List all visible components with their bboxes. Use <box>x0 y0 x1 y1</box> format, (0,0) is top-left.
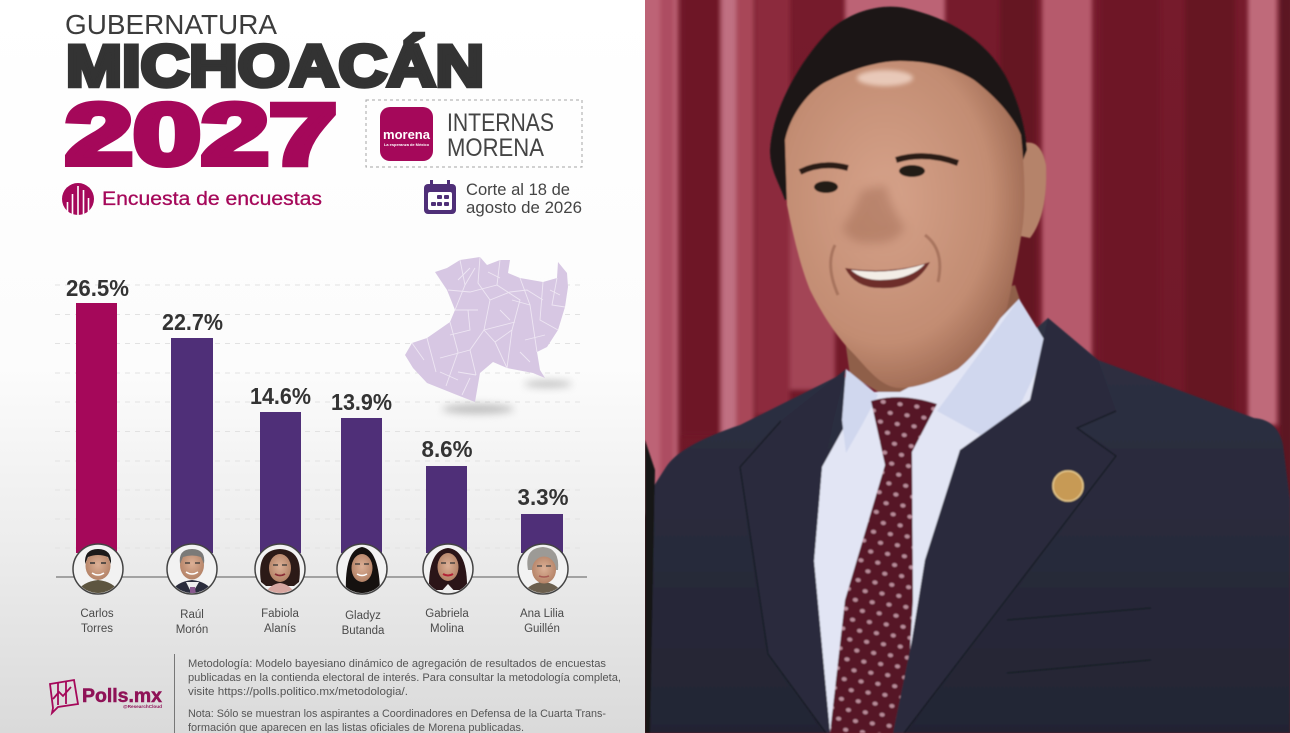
icon: morena logo: La esperanza de México <box>384 142 430 147</box>
bar: Ana Lilia Guillén 3.3% <box>518 484 568 553</box>
bar chart <box>66 275 568 553</box>
candidate names <box>80 608 565 637</box>
heading: 2027: 2027 <box>65 87 337 183</box>
icon: morena logo: morena <box>383 127 431 142</box>
bar: Gladyz Butanda 13.9%: 13.9% <box>331 389 392 415</box>
badge: Internas Morena <box>366 100 582 167</box>
map: Michoacán <box>405 257 572 414</box>
candidate names: Fabiola <box>261 608 299 620</box>
icon: chart bubble <box>50 680 78 713</box>
curtain background <box>640 0 1290 733</box>
candidate names: Gabriela <box>425 608 469 620</box>
candidate names: Molina <box>430 623 465 635</box>
methodology note: Nota: Sólo se muestran los aspirantes a Coordinadores en Defensa de la Cuarta Trans- <box>188 708 606 720</box>
logo: Polls.mx <box>50 680 162 713</box>
candidate names: Morón <box>176 624 208 636</box>
ear <box>1015 142 1046 238</box>
candidate names: Gladyz <box>345 610 381 622</box>
icon: calendar <box>424 180 456 214</box>
candidate names: Alanís <box>264 623 296 635</box>
portrait: Ana Lilia Guillén <box>518 544 568 595</box>
methodology note: visite https://polls.politico.mx/metodologia/. <box>188 686 408 698</box>
bar: Fabiola Alanís 14.6%: 14.6% <box>250 383 311 409</box>
subtitle: Encuesta de encuestas: Encuesta de encuestas <box>102 188 322 210</box>
logo: Polls.mx: @ResearchCloud <box>123 704 162 709</box>
lapel pin <box>1053 471 1083 501</box>
bar: Raúl Morón 22.7% <box>162 309 223 553</box>
subtitle: Encuesta de encuestas <box>62 183 322 215</box>
candidate names: Torres <box>81 623 113 635</box>
bar: Carlos Torres 26.5% <box>66 275 129 553</box>
candidate names: Ana Lilia <box>520 608 565 620</box>
mouth <box>845 262 930 288</box>
photo: smiling man in dark suit before a red curtain <box>640 0 1290 733</box>
suit jacket <box>645 318 1290 733</box>
head <box>770 7 1027 388</box>
bar: Ana Lilia Guillén 3.3%: 3.3% <box>518 484 568 510</box>
badge label <box>447 109 554 162</box>
bar: Raúl Morón 22.7%: 22.7% <box>162 309 223 335</box>
heading: Michoacán: MICHOACÁN <box>66 34 484 99</box>
panel: infographic background <box>0 0 645 733</box>
bar: Gladyz Butanda 13.9% <box>331 389 392 553</box>
bar: Carlos Torres 26.5%: 26.5% <box>66 275 129 301</box>
icon: morena logo <box>380 107 433 161</box>
badge label: MORENA <box>447 134 544 162</box>
candidate names: Raúl <box>180 609 204 621</box>
candidate names: Guillén <box>524 623 560 635</box>
necktie <box>830 397 937 733</box>
methodology note: publicadas en la contienda electoral de interés. Para consultar la metodología completa, <box>188 672 621 684</box>
nose <box>842 185 905 243</box>
heading: Gubernatura: GUBERNATURA <box>65 9 277 40</box>
eyebrows <box>800 156 958 172</box>
hair <box>770 7 1027 200</box>
neck <box>845 284 1020 393</box>
jacket lapels <box>768 318 1093 733</box>
portrait: Raúl Morón <box>167 544 217 595</box>
portrait: Carlos Torres <box>73 544 123 595</box>
date cut-off: Corte al 18 de <box>466 181 570 199</box>
bar: Fabiola Alanís 14.6% <box>250 383 311 553</box>
methodology note <box>188 658 621 733</box>
date cut-off: agosto de 2026 <box>466 199 582 217</box>
portrait: Gabriela Molina <box>423 544 473 595</box>
candidate names: Butanda <box>342 625 385 637</box>
portrait: Gladyz Butanda <box>337 544 387 595</box>
eyes <box>814 165 925 193</box>
bar: Gabriela Molina 8.6%: 8.6% <box>422 436 472 462</box>
icon: poll bars in circle <box>62 183 94 215</box>
candidate names: Carlos <box>80 608 114 620</box>
bar: Gabriela Molina 8.6% <box>422 436 472 553</box>
badge label: INTERNAS <box>447 109 554 137</box>
portrait: Fabiola Alanís <box>255 544 305 595</box>
logo: Polls.mx: Polls.mx <box>82 686 162 707</box>
methodology note: Metodología: Modelo bayesiano dinámico de agregación de resultados de encuestas <box>188 658 607 670</box>
facial shading <box>831 235 940 295</box>
map shadows <box>442 380 572 414</box>
shirt <box>814 299 1048 733</box>
date cut-off <box>424 180 582 217</box>
